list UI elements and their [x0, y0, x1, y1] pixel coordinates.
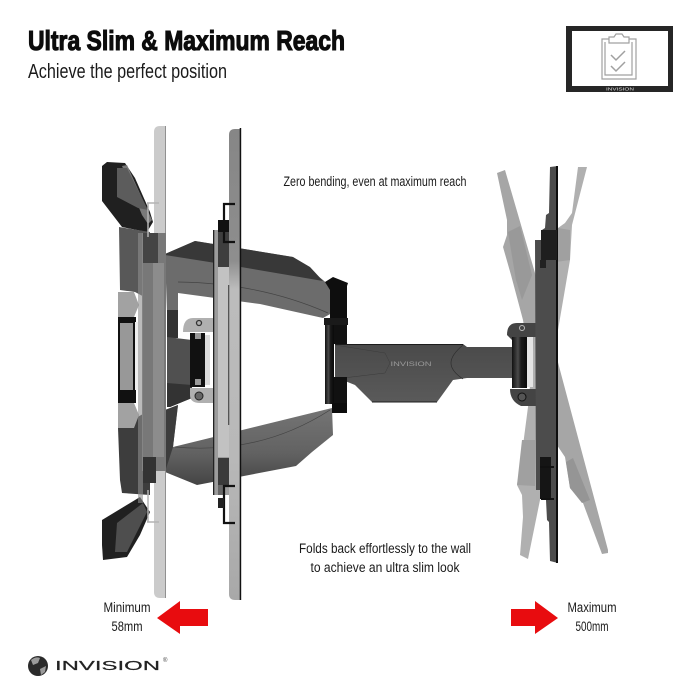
caption: folds back [299, 541, 471, 575]
lower arm [165, 405, 333, 485]
label: maximum 500mm: 500mm [576, 619, 608, 634]
mount: folded arm assembly [102, 126, 333, 600]
title: Ultra Slim & Maximum Reach [28, 25, 345, 56]
logo: invision: INVISION [55, 658, 160, 673]
subtitle: Achieve the perfect position [28, 61, 227, 83]
label: minimum 58mm: 58mm [112, 619, 142, 634]
TV panel at max reach [535, 166, 558, 563]
ghost tilted TV panel: tilted left at top [497, 170, 608, 554]
label: maximum 500mm [568, 600, 616, 634]
middle TV panel with bracket [213, 128, 241, 600]
wall plate body [118, 227, 150, 495]
caption: folds back: to achieve an ultra slim look [310, 560, 460, 575]
arrow: right red [511, 601, 558, 634]
bottom wing of wall plate [102, 497, 150, 560]
caption: zero bending: Zero bending, even at maximum reach [284, 174, 466, 189]
ghost TV panel [138, 126, 166, 598]
icon: clipboard screen badge [566, 26, 673, 92]
icon: clipboard screen badge: INVISION [606, 86, 634, 92]
elbow joint [324, 277, 348, 413]
label: minimum 58mm: Minimum [104, 600, 150, 615]
label: maximum 500mm: Maximum [568, 600, 616, 615]
extended arm: INVISION [390, 362, 432, 368]
ghost tilted TV panel: tilted right at top [517, 167, 587, 559]
upper arm [165, 241, 332, 320]
mount: extended arm assembly [324, 166, 608, 563]
central hinge [167, 310, 213, 407]
right hinge [507, 323, 536, 406]
label: minimum 58mm [104, 600, 150, 634]
extended arm [335, 344, 513, 402]
caption: folds back: Folds back effortlessly to the wall [299, 541, 471, 556]
top wing of wall plate [102, 162, 153, 232]
logo: invision [28, 656, 168, 676]
arrow: left red [157, 601, 208, 634]
logo: invision: ® [163, 657, 168, 664]
